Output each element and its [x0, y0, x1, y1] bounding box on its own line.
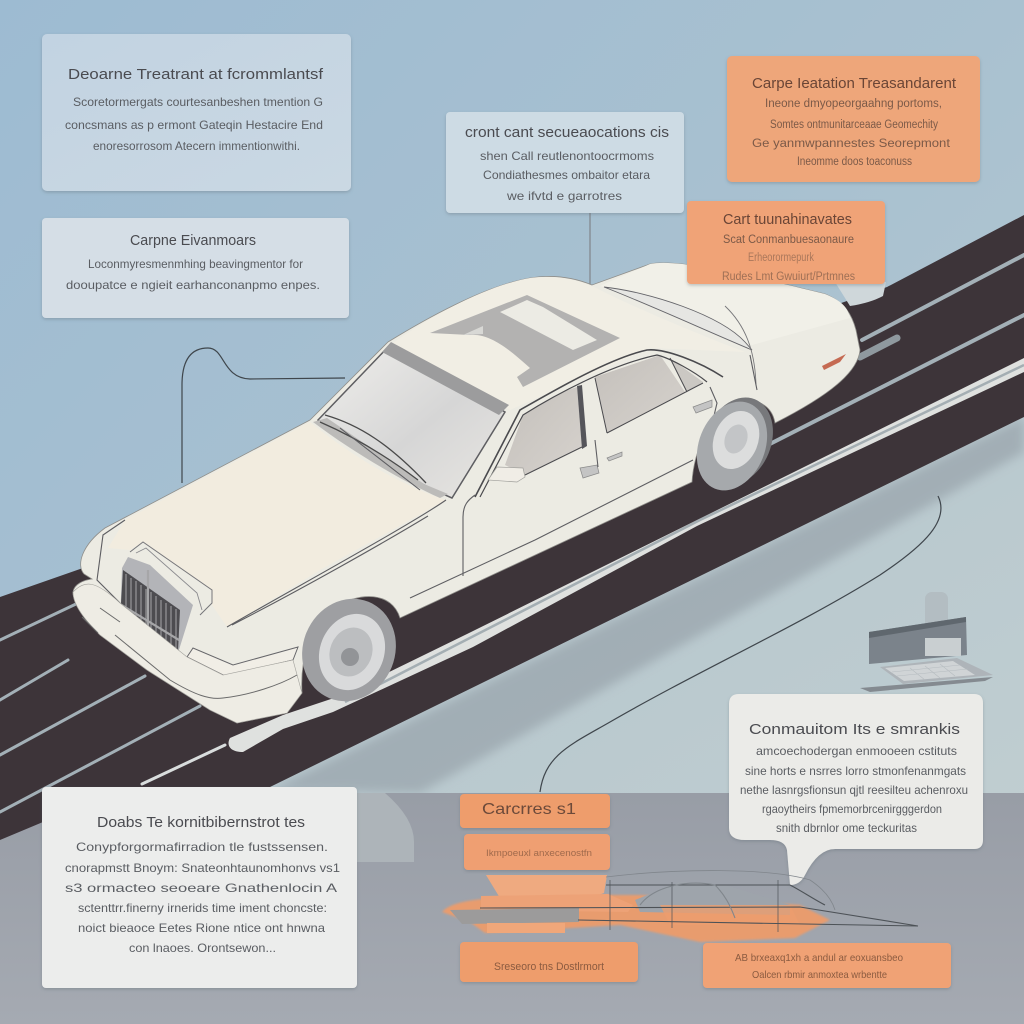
panel: top right orange: Ineomme doos toaconuss [797, 156, 912, 168]
sunroof [430, 295, 620, 387]
label: orange bottom right [703, 943, 951, 988]
label: orange heading [460, 794, 610, 828]
panel: upper right orange small: Rudes Lmt Gwuiurt/Prtmnes [722, 271, 855, 283]
label: orange bottom right: Oalcen rbmir anmoxtea wrbentte [752, 969, 887, 981]
road lane markings [0, 255, 1024, 812]
road white edge [229, 358, 1024, 752]
panel: top center [446, 112, 684, 213]
body lines [97, 355, 757, 627]
light area behind trunk [835, 282, 886, 306]
panel: bottom left: cnorapmstt Bnoym: Snateonhtaunomhonvs vs1 [65, 861, 340, 875]
panel: bottom left: s3 ormacteo seoeare Gnathenlocin A [65, 881, 337, 895]
label: orange small [464, 834, 610, 870]
panel: top center: Condiathesmes ombaitor etara [483, 168, 650, 182]
car hood [108, 422, 446, 627]
panel: lower right speech bubble: nethe lasnrgsfionsun qjtl reesilteu achenroxu [740, 783, 968, 797]
panel: top right orange [727, 56, 980, 182]
panel: middle left: dooupatce e ngieit earhanconanpmo enpes. [66, 278, 320, 292]
side window front [505, 387, 582, 475]
panel: top right orange: Ineone dmyopeorgaahng portoms, [765, 98, 942, 110]
side window rear [595, 355, 685, 433]
side mirror [488, 467, 525, 482]
road [0, 215, 1024, 850]
cutaway car diagram [442, 871, 918, 942]
panel: upper right orange small: Cart tuunahinavates [723, 212, 852, 228]
panel: bottom left: Doabs Te kornitbibernstrot tes [97, 815, 305, 831]
rear wheel [684, 387, 785, 501]
panel: middle left [42, 218, 349, 318]
label: orange bottom left [460, 942, 638, 982]
panel: lower right speech bubble: Conmauitom Its e smrankis [749, 722, 960, 738]
icon: keyboard device [860, 592, 993, 692]
panel: top left: enoresorrosom Atecern immentionwithi. [93, 139, 300, 153]
tail light [822, 354, 846, 370]
panel: top center: cront cant secueaocations cis [465, 125, 669, 141]
front wheel [287, 585, 411, 715]
label: orange bottom left: Sreseoro tns Dostlrmort [494, 961, 604, 973]
panel: top right orange: Ge yanmwpannestes Seorepmont [752, 138, 951, 150]
panel: bottom left: Conypforgormafirradion tle fustssensen. [76, 840, 328, 854]
panel: upper right orange small: Erheorormepurk [748, 252, 814, 264]
panel: lower right speech bubble [729, 694, 983, 885]
front bumper [73, 584, 302, 723]
windshield [318, 345, 505, 498]
door handles [580, 400, 712, 478]
panel: top center: shen Call reutlenontoocrmoms [480, 149, 654, 163]
headlights [187, 647, 298, 675]
panel: middle left: Loconmyresmenmhing beavingmentor for [88, 257, 303, 271]
panel: top right orange: Carpe Ieatation Treasandarent [752, 76, 956, 92]
panel: top right orange: Somtes ontmunitarceaae Geomechity [770, 119, 938, 131]
panel: top left: Scoretormergats courtesanbeshen tmention G [73, 95, 323, 109]
panel: lower right speech bubble: amcoechodergan enmooeen cstituts [756, 744, 957, 758]
panel: top center: we ifvtd e garrotres [506, 189, 622, 203]
grille [120, 542, 212, 653]
car trunk [600, 263, 850, 345]
panel: top left: concsmans as p ermont Gateqin Hestacire End [65, 118, 323, 132]
panel: lower right speech bubble: sine horts e nsrres lorro stmonfenanmgats [745, 764, 966, 778]
panel: upper right orange small [687, 201, 885, 284]
panel: bottom left: noict bieaoce Eetes Rione ntice ont hnwna [78, 921, 325, 935]
panel: top left [42, 34, 351, 191]
label: orange small: Ikmpoeuxl anxecenostfn [486, 848, 592, 859]
label: orange heading: Carcrres s1 [482, 801, 576, 818]
window frame [475, 350, 723, 497]
panel: bottom left: con lnaoes. Orontsewon... [129, 941, 276, 955]
panel: upper right orange small: Scat Conmanbuesaonaure [723, 234, 854, 246]
panel: lower right speech bubble: snith dbrnlor ome teckuritas [776, 821, 917, 835]
wipers [320, 415, 426, 483]
car body [73, 263, 860, 723]
panel: lower right speech bubble: rgaoytheirs fpmemorbrcenirgggerdon [762, 802, 942, 816]
leader lines [182, 213, 941, 792]
panel: bottom left: sctenttrr.finerny irnerids time iment choncste: [78, 901, 327, 915]
car [73, 263, 860, 723]
rear window [604, 287, 752, 350]
car roof [390, 277, 745, 410]
panel: middle left: Carpne Eivanmoars [130, 233, 256, 249]
panel: top left: Deoarne Treatrant at fcrommlantsf [68, 67, 324, 83]
label: orange bottom right: AB brxeaxq1xh a andul ar eoxuansbeo [735, 952, 903, 964]
panel: bottom left [42, 787, 357, 988]
